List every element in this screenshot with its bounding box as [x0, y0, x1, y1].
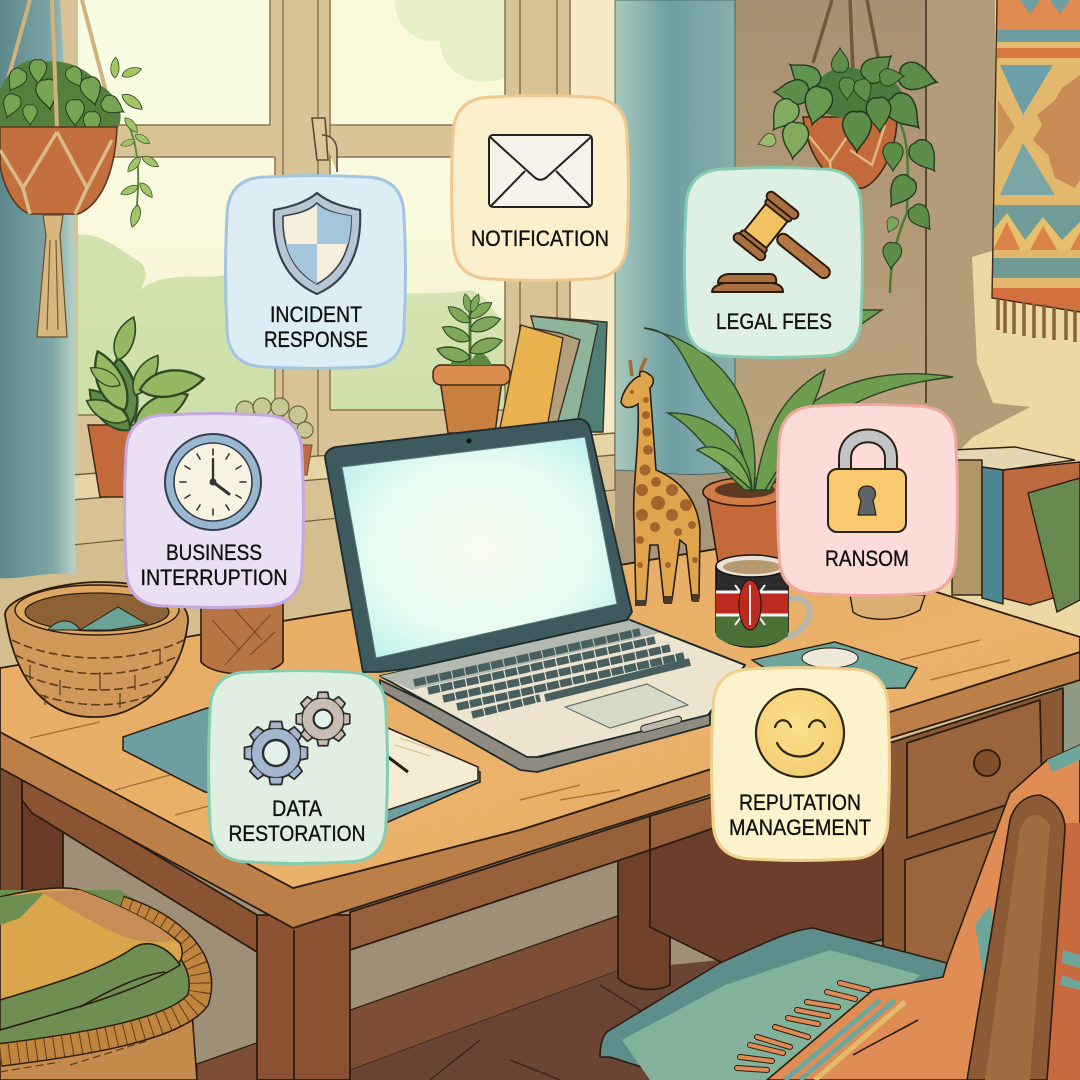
card: reputation management: MANAGEMENT	[729, 815, 871, 840]
upper drawer	[907, 700, 1042, 838]
icon: gavel	[712, 190, 848, 300]
blanket	[767, 745, 1080, 1080]
desk top	[0, 540, 1080, 888]
label: LEGAL FEES	[716, 309, 832, 334]
trackpad	[565, 684, 688, 728]
back-right leg	[618, 845, 670, 989]
label: BUSINESS	[166, 540, 262, 565]
hanging plant: left macrame	[0, 0, 161, 337]
side apron	[22, 775, 257, 952]
card: ransom	[778, 404, 958, 596]
card: business interruption: INTERRUPTION	[140, 565, 288, 590]
windowsill books	[500, 316, 607, 432]
laptop base	[380, 680, 710, 772]
potted plant and large leaves	[644, 310, 953, 575]
giraffe figurine	[621, 358, 700, 606]
icon: large gear	[244, 722, 308, 784]
shelf books on right	[952, 447, 1080, 612]
icon: shield	[274, 193, 360, 294]
dark recess panel	[650, 770, 883, 963]
card: legal fees	[684, 168, 862, 358]
plant saucer	[850, 595, 925, 619]
icon: small gear	[296, 692, 350, 746]
card: data restoration	[208, 670, 388, 864]
trackpad notch	[640, 715, 682, 733]
label: REPUTATION	[739, 790, 861, 815]
hanging plant: right	[756, 0, 945, 293]
card: data restoration: RESTORATION	[228, 821, 366, 846]
icon: clock	[165, 434, 261, 530]
label: INCIDENT	[270, 302, 362, 327]
laptop	[325, 419, 745, 772]
back-left leg	[0, 760, 22, 900]
chair seat	[600, 928, 1000, 1080]
windowsill plant: succulent	[236, 398, 313, 475]
front leg	[257, 915, 350, 1080]
mug with Kenyan flag	[716, 555, 810, 647]
card: business interruption	[124, 414, 304, 608]
card: incident response	[226, 176, 406, 368]
icon: smiley face	[756, 689, 844, 777]
wall tapestry	[992, 0, 1080, 342]
desk thickness	[0, 652, 1080, 928]
curtain: left	[0, 0, 75, 578]
label: RANSOM	[825, 546, 909, 571]
window handle	[312, 118, 337, 172]
icon: padlock	[828, 430, 906, 532]
notebook	[123, 702, 480, 822]
card: reputation management	[712, 668, 890, 860]
windowsill plant: left pot	[81, 314, 206, 497]
chair back	[967, 795, 1065, 1080]
card: incident response: RESPONSE	[264, 327, 368, 352]
basket on desk	[5, 582, 188, 717]
mouse pad and mouse	[752, 642, 917, 690]
carved jar	[201, 603, 283, 674]
front apron	[350, 816, 650, 950]
lower drawer	[905, 815, 1045, 1000]
label: NOTIFICATION	[471, 226, 609, 251]
drawer frame	[883, 688, 1063, 1000]
windowsill plant: centre pot	[433, 293, 510, 433]
card: notification	[452, 96, 628, 280]
under-desk wall and floor	[0, 680, 1080, 1080]
label: DATA	[272, 796, 322, 821]
window	[60, 0, 615, 545]
laptop screen	[325, 419, 632, 672]
curtain: right	[615, 0, 735, 474]
keyboard	[414, 632, 690, 715]
floor basket with folded blanket	[0, 888, 200, 1080]
blanket fringe	[737, 983, 868, 1070]
desk	[0, 540, 1080, 1080]
icon: envelope	[489, 135, 592, 207]
drawer knob	[974, 750, 1000, 776]
chair and draped blanket	[600, 745, 1080, 1080]
